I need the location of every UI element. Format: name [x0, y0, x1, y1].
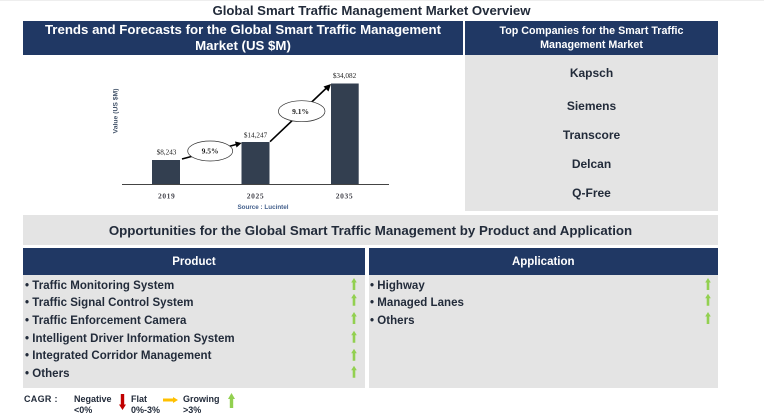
CAGR ellipse 9.5% — [188, 141, 233, 161]
legend: CAGR: Negative — [74, 394, 112, 404]
panel heading: top companies: Top Companies for the Smart Traffic — [500, 25, 683, 37]
panel heading: top companies: Management Market — [540, 38, 643, 50]
panel heading: top companies — [465, 21, 718, 55]
company: Delcan: Delcan — [572, 157, 611, 171]
value labels — [157, 72, 357, 156]
panel heading: trends and forecasts: Market (US $M) — [195, 38, 291, 53]
source: Source : Lucintel — [237, 204, 289, 211]
panel: companies background — [465, 55, 718, 211]
application item 3: • Others — [370, 315, 415, 327]
panel heading: product — [23, 248, 365, 275]
legend: CAGR: CAGR : — [24, 394, 58, 404]
panel heading: application: Application — [512, 256, 575, 268]
heading: opportunities: Opportunities for the Global Smart Traffic Management by Product and Application — [109, 223, 632, 238]
panel heading: product: Product — [172, 256, 216, 268]
value labels: $34,082 — [333, 72, 357, 80]
panel: product list background — [23, 275, 365, 388]
panel heading: trends and forecasts: Trends and Forecasts for the Global Smart Traffic Management — [45, 22, 441, 37]
product item 6: • Others — [25, 368, 70, 380]
legend: CAGR — [24, 393, 235, 415]
panel: application list background — [368, 275, 718, 388]
company: Q-Free: Q-Free — [572, 186, 611, 200]
CAGR ellipse 9.5%: 9.5% — [202, 146, 218, 156]
title: Global Smart Traffic Management Market Overview — [212, 3, 531, 18]
company: Kapsch: Kapsch — [570, 66, 613, 80]
top edge strip — [0, 0, 764, 1]
product item 5: • Integrated Corridor Management — [25, 350, 211, 362]
product item 1: • Traffic Monitoring System — [25, 280, 174, 292]
value labels: $8,243 — [157, 148, 177, 156]
heading: opportunities — [23, 215, 718, 245]
CAGR ellipse 9.1%: 9.1% — [292, 107, 309, 116]
product item 4: • Intelligent Driver Information System — [25, 333, 235, 345]
y axis label: Value (US $M) — [112, 89, 120, 133]
year labels: 2025 — [247, 192, 264, 200]
bar chart — [112, 72, 389, 211]
CAGR ellipse 9.1% — [278, 101, 325, 122]
company: Transcore: Transcore — [563, 128, 620, 142]
legend: CAGR: >3% — [183, 405, 201, 415]
year labels — [158, 192, 353, 200]
panel heading: application — [368, 248, 718, 275]
application item 2: • Managed Lanes — [370, 297, 464, 309]
company: Siemens: Siemens — [567, 99, 616, 113]
product item 2: • Traffic Signal Control System — [25, 297, 194, 309]
legend: CAGR: 0%-3% — [131, 405, 160, 415]
application item 1: • Highway — [370, 280, 425, 292]
legend: CAGR: <0% — [74, 405, 92, 415]
year labels: 2035 — [336, 192, 353, 200]
bars — [152, 84, 359, 184]
legend: CAGR: Flat — [131, 394, 147, 404]
x axis — [122, 184, 389, 186]
value labels: $14,247 — [244, 132, 268, 140]
product item 3: • Traffic Enforcement Camera — [25, 315, 186, 327]
legend: CAGR: Growing — [183, 394, 220, 404]
year labels: 2019 — [158, 192, 175, 200]
panel heading: trends and forecasts — [23, 21, 463, 55]
growth arrows — [182, 84, 331, 159]
